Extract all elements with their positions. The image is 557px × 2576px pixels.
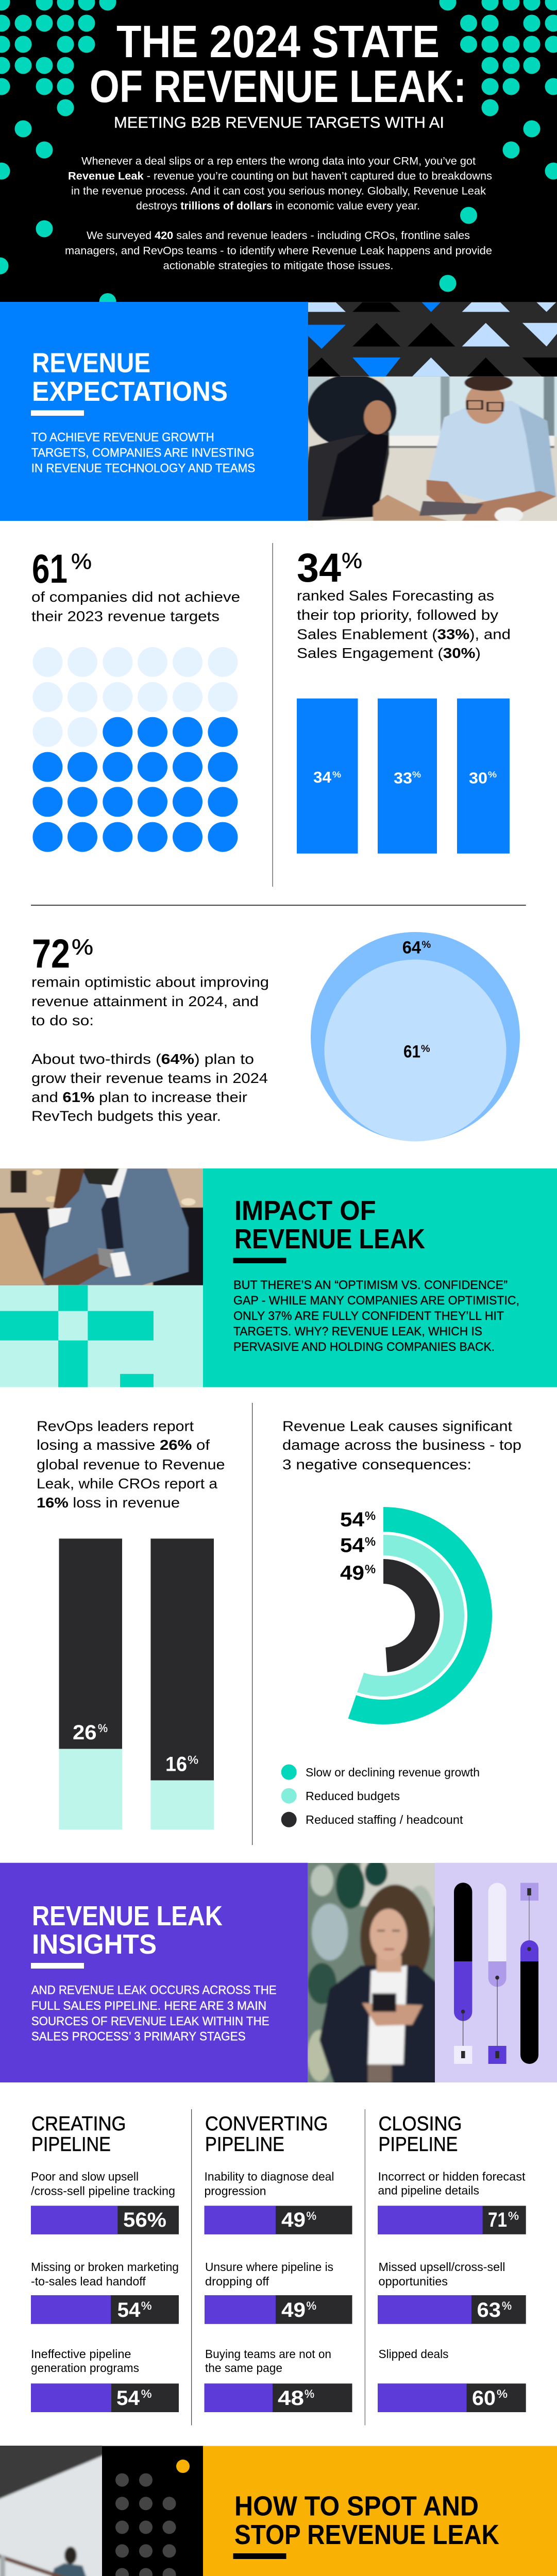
plan description: About two-thirds ( 64% ) plan to — [31, 1051, 254, 1067]
stat description — [297, 588, 511, 661]
radial bar chart: 54 — [340, 1509, 364, 1531]
radial bar chart: % — [365, 1535, 376, 1548]
panel: negative consequences — [281, 1418, 521, 1827]
stat: 61%: % — [71, 550, 92, 574]
description: global revenue to Revenue — [37, 1456, 225, 1472]
intro paragraph: Whenever a deal slips or a rep enters the wrong data into your CRM, you’ve got — [81, 156, 476, 167]
item: upsell opportunities 63%: 63 — [477, 2299, 501, 2321]
item: buying teams 48%: the same page — [205, 2361, 282, 2375]
title: THE 2024 STATE — [116, 16, 440, 67]
bar chart: priorities: % — [488, 770, 497, 779]
item: pipeline drop-off 49% — [205, 2260, 352, 2324]
heading: PIPELINE — [31, 2133, 111, 2156]
item: pipeline programs 54%: Ineffective pipeline — [31, 2347, 131, 2361]
item: upsell tracking 56% — [31, 2170, 179, 2234]
nested circle chart: % — [422, 940, 431, 950]
dot grid chart: 61 percent — [32, 647, 238, 852]
item: forecast details 71%: Incorrect or hidden forecast — [378, 2170, 526, 2183]
heading: CONVERTING — [205, 2113, 328, 2135]
item: buying teams 48% — [204, 2347, 352, 2412]
heading — [32, 1901, 223, 1960]
title — [90, 16, 466, 112]
heading: REVENUE — [32, 347, 150, 378]
photo: two colleagues with tablet — [298, 373, 557, 526]
item: pipeline drop-off 49%: % — [306, 2299, 316, 2312]
heading — [378, 2113, 462, 2156]
stat: 34%: % — [342, 549, 362, 573]
stat: 34%: 34 — [297, 545, 341, 590]
item: upsell opportunities 63%: % — [502, 2299, 512, 2312]
survey paragraph — [65, 230, 492, 272]
heading: EXPECTATIONS — [32, 376, 228, 407]
stacked bar chart: 26% and 16%: % — [188, 1754, 198, 1767]
section intro: TO ACHIEVE REVENUE GROWTH — [31, 430, 214, 444]
description: damage across the business - top — [282, 1437, 521, 1453]
plan description: and 61% plan to increase their — [31, 1089, 247, 1105]
radial bar chart: 54 — [340, 1534, 364, 1557]
stat description: revenue attainment in 2024, and — [31, 993, 259, 1009]
item: buying teams 48%: Buying teams are not on — [205, 2347, 331, 2361]
section intro: TARGETS, COMPANIES ARE INVESTING — [31, 446, 255, 460]
intro paragraph: in the revenue process. And it can cost you serious money. Globally, Revenue Leak — [71, 185, 486, 197]
item: buying teams 48%: % — [305, 2387, 314, 2400]
item: deal progression 49%: progression — [204, 2184, 266, 2197]
bar chart: priorities: 34 — [313, 768, 332, 786]
nested circle chart: % — [421, 1044, 430, 1054]
item: pipeline drop-off 49%: Unsure where pipeline is — [205, 2260, 333, 2274]
panel: closing pipeline — [378, 2113, 526, 2412]
stacked bar chart: 26% and 16%: % — [98, 1722, 108, 1735]
intro paragraph: destroys trillions of dollars in economic value every year. — [136, 200, 420, 212]
heading: PIPELINE — [205, 2133, 284, 2156]
heading — [205, 2113, 328, 2156]
stat description — [31, 974, 269, 1028]
item: pipeline drop-off 49%: dropping off — [205, 2275, 269, 2288]
stat description: ranked Sales Forecasting as — [297, 588, 494, 604]
decorative teal dot fields — [0, 0, 557, 310]
item: upsell opportunities 63%: Missed upsell/cross-sell — [378, 2260, 505, 2274]
survey paragraph: We surveyed 420 sales and revenue leaders - including CROs, frontline sales — [87, 230, 470, 242]
stat: 34% — [297, 545, 362, 590]
panel: global revenue loss — [37, 1418, 225, 1829]
item: forecast details 71%: 71 — [488, 2209, 507, 2231]
panel: revenue expectations banner — [0, 302, 557, 526]
legend: Reduced staffing / headcount — [306, 1813, 463, 1826]
stacked bar chart: 26% and 16%: 16 — [165, 1753, 187, 1775]
description: 3 negative consequences: — [282, 1456, 471, 1472]
intro paragraph — [68, 156, 492, 212]
item: pipeline programs 54%: 54 — [116, 2387, 140, 2410]
bar chart: priorities: 33 — [394, 769, 412, 787]
section intro: SALES PROCESS’ 3 PRIMARY STAGES — [31, 2030, 246, 2043]
panel: 34% sales forecasting priority — [297, 545, 511, 854]
nested circle chart — [311, 932, 520, 1142]
item: slipped deals 60%: % — [497, 2387, 508, 2400]
section intro — [31, 1984, 277, 2043]
item: deal progression 49% — [204, 2170, 352, 2234]
legend — [281, 1765, 480, 1827]
slider graphic — [435, 1863, 557, 2082]
radial bar chart: 49 — [340, 1562, 364, 1584]
description — [37, 1418, 225, 1511]
item: upsell tracking 56%: /cross-sell pipeline tracking — [31, 2184, 175, 2197]
section intro — [31, 430, 255, 475]
legend: Slow or declining revenue growth — [306, 1766, 480, 1779]
section intro: BUT THERE’S AN “OPTIMISM VS. CONFIDENCE” — [233, 1278, 508, 1292]
heading: PIPELINE — [378, 2133, 458, 2156]
legend: Reduced budgets — [306, 1789, 400, 1803]
stacked bar chart: 26% and 16%: 26 — [73, 1721, 97, 1744]
heading: IMPACT OF — [234, 1195, 376, 1226]
description — [282, 1418, 521, 1472]
radial bar chart: % — [365, 1509, 376, 1522]
stat description: Sales Enablement ( 33%), and — [297, 626, 511, 642]
section intro: GAP - WHILE MANY COMPANIES ARE OPTIMISTIC, — [233, 1294, 519, 1308]
item: upsell opportunities 63%: opportunities — [378, 2275, 448, 2288]
section intro: PERVASIVE AND HOLDING COMPANIES BACK. — [233, 1340, 495, 1354]
panel: how to spot and stop banner — [0, 2442, 557, 2576]
stat description: Sales Engagement ( 30%) — [297, 645, 481, 661]
item: marketing handoff 54% — [31, 2260, 179, 2324]
item: marketing handoff 54%: 54 — [117, 2299, 141, 2321]
item: slipped deals 60%: Slipped deals — [378, 2347, 448, 2361]
description: Revenue Leak causes significant — [282, 1418, 512, 1434]
section intro: AND REVENUE LEAK OCCURS ACROSS THE — [31, 1984, 277, 1997]
item: pipeline programs 54% — [31, 2347, 179, 2412]
panel: hero header — [0, 0, 557, 310]
heading: STOP REVENUE LEAK — [234, 2519, 499, 2550]
stat description: their 2023 revenue targets — [31, 608, 220, 624]
heading — [234, 2490, 499, 2550]
item: marketing handoff 54%: -to-sales lead handoff — [31, 2275, 146, 2288]
teal block pattern — [0, 1285, 203, 1387]
bar chart: priorities: % — [412, 770, 421, 779]
photo: businessman at laptop — [0, 1168, 203, 1285]
photo: man on balcony — [0, 2442, 108, 2576]
item: deal progression 49%: Inability to diagnose deal — [204, 2170, 334, 2183]
section intro: TARGETS. WHY? REVENUE LEAK, WHICH IS — [233, 1325, 482, 1338]
item: forecast details 71%: % — [508, 2209, 519, 2223]
item: slipped deals 60% — [378, 2347, 526, 2412]
item: pipeline programs 54%: % — [141, 2387, 151, 2400]
heading: CLOSING — [378, 2113, 462, 2135]
bar chart: priorities: % — [332, 770, 341, 779]
item: forecast details 71%: and pipeline details — [378, 2183, 479, 2197]
heading — [31, 2113, 126, 2156]
section intro: ONLY 37% ARE FULLY CONFIDENT THEY’LL HIT — [233, 1309, 504, 1323]
item: deal progression 49%: 49 — [281, 2209, 306, 2231]
item: forecast details 71% — [378, 2170, 526, 2234]
panel: converting pipeline — [204, 2113, 352, 2412]
panel: 61% did not achieve targets — [31, 546, 240, 852]
intro paragraph: Revenue Leak - revenue you’re counting on but haven’t captured due to breakdowns — [68, 170, 492, 182]
section intro: SOURCES OF REVENUE LEAK WITHIN THE — [31, 2014, 269, 2028]
heading — [234, 1195, 425, 1255]
radial bar chart: % — [365, 1562, 376, 1575]
item: deal progression 49%: % — [306, 2209, 316, 2223]
item: slipped deals 60%: 60 — [472, 2387, 496, 2410]
item: upsell opportunities 63% — [378, 2260, 526, 2324]
heading: INSIGHTS — [32, 1929, 157, 1960]
title: OF REVENUE LEAK: — [90, 61, 466, 112]
stat: 72%: % — [72, 935, 93, 960]
stat description: remain optimistic about improving — [31, 974, 269, 990]
panel: creating pipeline — [31, 2113, 179, 2412]
heading: REVENUE LEAK — [32, 1901, 223, 1931]
item: upsell tracking 56%: 56% — [123, 2209, 166, 2231]
photo: woman reading phone — [304, 1859, 438, 2087]
survey paragraph: managers, and RevOps teams - to identify where Revenue Leak happens and provide — [65, 245, 492, 257]
plan description: grow their revenue teams in 2024 — [31, 1070, 268, 1086]
dot grid graphic — [102, 2446, 203, 2576]
item: marketing handoff 54%: % — [141, 2299, 151, 2312]
description: 16% loss in revenue — [37, 1495, 180, 1511]
stat description: their top priority, followed by — [297, 607, 498, 623]
section intro: IN REVENUE TECHNOLOGY AND TEAMS — [31, 461, 255, 475]
bar chart: priorities: 30 — [469, 769, 487, 787]
plan description: RevTech budgets this year. — [31, 1108, 221, 1124]
radial bar chart — [340, 1507, 492, 1724]
section intro: FULL SALES PIPELINE. HERE ARE 3 MAIN — [31, 1999, 266, 2013]
stat description: of companies did not achieve — [31, 589, 240, 605]
nested circle chart: 64 — [402, 938, 421, 958]
triangle pattern — [308, 302, 557, 377]
stat description — [31, 589, 240, 624]
item: pipeline programs 54%: generation programs — [31, 2361, 139, 2375]
description: Leak, while CROs report a — [37, 1476, 217, 1492]
heading: HOW TO SPOT AND — [234, 2490, 479, 2521]
plan description — [31, 1051, 268, 1124]
stat: 72%: 72 — [32, 930, 70, 976]
item: marketing handoff 54%: Missing or broken marketing — [31, 2260, 179, 2274]
nested circle chart: 61 — [403, 1042, 420, 1061]
heading: CREATING — [31, 2113, 126, 2135]
heading — [32, 347, 228, 407]
panel: 72% remain optimistic — [31, 930, 520, 1142]
stacked bar chart: 26% and 16% — [59, 1538, 214, 1829]
subtitle: MEETING B2B REVENUE TARGETS WITH AI — [114, 113, 444, 131]
description: losing a massive 26% of — [37, 1437, 210, 1453]
stat description: to do so: — [31, 1012, 94, 1028]
survey paragraph: actionable strategies to mitigate those issues. — [163, 260, 394, 272]
heading: REVENUE LEAK — [234, 1224, 425, 1255]
panel: impact of revenue leak banner — [0, 1165, 557, 1387]
item: buying teams 48%: 48 — [278, 2387, 304, 2410]
stat: 61%: 61 — [32, 546, 67, 591]
item: upsell tracking 56%: Poor and slow upsell — [31, 2170, 139, 2183]
description: RevOps leaders report — [37, 1418, 194, 1434]
bar chart: priorities — [297, 699, 510, 854]
item: pipeline drop-off 49%: 49 — [281, 2299, 306, 2321]
section intro — [233, 1278, 519, 1354]
panel: revenue leak insights banner — [0, 1859, 557, 2087]
